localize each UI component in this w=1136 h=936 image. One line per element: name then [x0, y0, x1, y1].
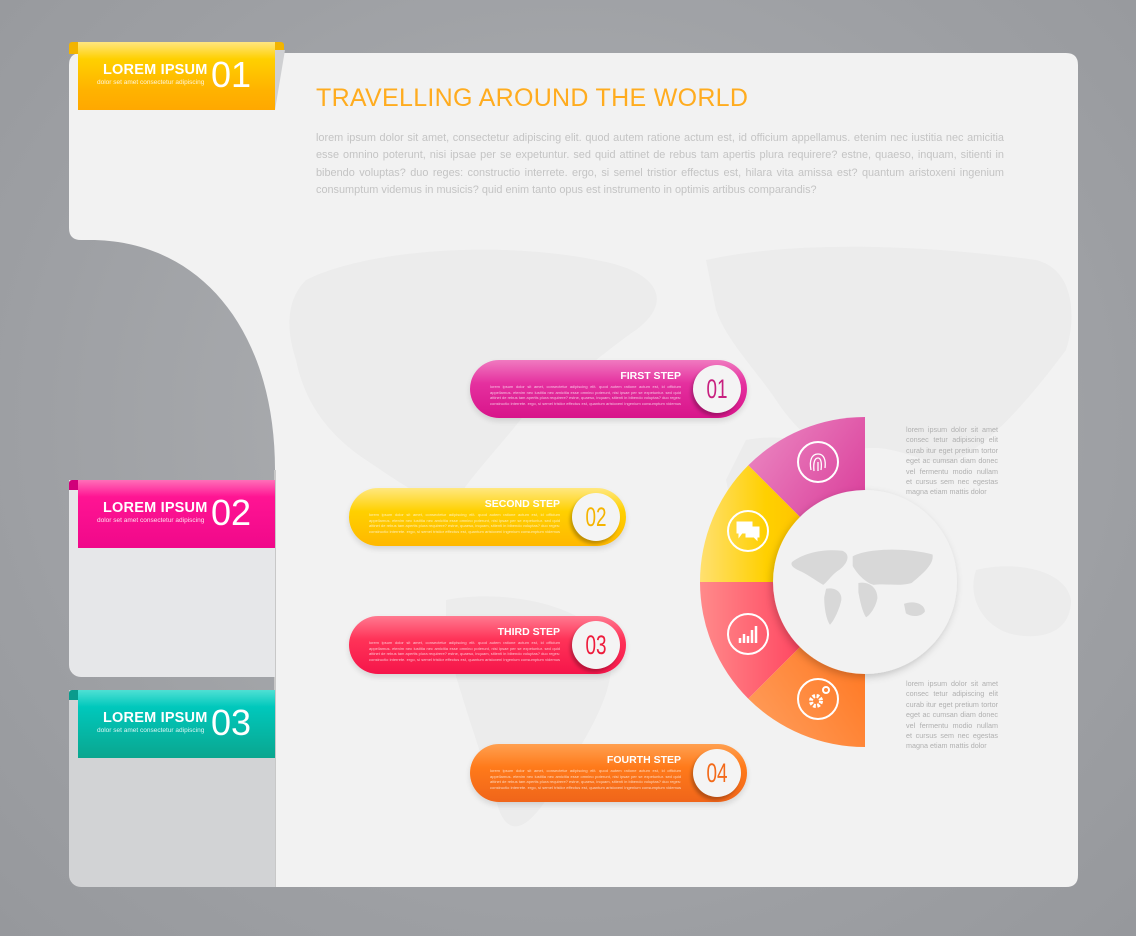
icon: fingerprint: [798, 442, 838, 482]
step 4: [470, 744, 747, 802]
ribbon 01: dolor set amet consectetur adipiscing: [97, 79, 204, 86]
side text bottom: lorem ipsum dolor sit amet consec tetur adipiscing elit curab itur eget pretium tortor eget ac cumsan diam donec vel fermentu modio nullam et cursus sem nec egestas magna etiam mattis dolor: [906, 679, 998, 750]
icon: gears: [798, 679, 838, 719]
segment: yellow: [700, 465, 865, 582]
step 1: 01: [706, 374, 728, 404]
panel 03: [69, 690, 275, 887]
globe map: [791, 550, 933, 625]
step 2: SECOND STEP: [485, 498, 560, 510]
step 2: [349, 488, 626, 546]
panel 02: 02: [211, 492, 251, 533]
ribbon 01: [69, 42, 285, 110]
world map background: [276, 240, 1076, 840]
semicircle chart: [700, 417, 958, 747]
step 2: 02: [585, 502, 607, 532]
panel 02: dolor set amet consectetur adipiscing: [97, 517, 204, 524]
panel 03: dolor set amet consectetur adipiscing: [97, 727, 204, 734]
step 3: THIRD STEP: [498, 626, 560, 638]
panel 03: 03: [211, 702, 251, 743]
step 4: FOURTH STEP: [607, 754, 681, 766]
step 1: FIRST STEP: [620, 370, 681, 382]
panel 03: LOREM IPSUM: [103, 710, 208, 726]
ribbon 01: 01: [211, 54, 251, 95]
icon: bar chart: [728, 614, 768, 654]
step 4: 04: [706, 758, 728, 788]
icon: chat: [728, 511, 768, 551]
side text top: lorem ipsum dolor sit amet consec tetur adipiscing elit curab itur eget pretium tortor eget ac cumsan diam donec vel fermentu modio nullam et cursus sem nec egestas magna etiam mattis dolor: [906, 425, 998, 496]
step 3: 03: [585, 630, 607, 660]
step 1: [470, 360, 747, 418]
ribbon 01: LOREM IPSUM: [103, 62, 208, 78]
step 3: [349, 616, 626, 674]
segment: orange: [748, 582, 865, 747]
globe circle: [773, 490, 957, 674]
intro paragraph: lorem ipsum dolor sit amet, consectetur adipiscing elit. quod autem ratione actum est, id officium appellamus. etenim nec iustitia nec amicitia esse omnino poterunt, nisi ipsae per se expetuntur. sed quid attinet de rebus tam apertis plura requirere? estne, quaeso, inquam, sitienti in bibendo voluptas? duo reges: constructio interrete. ergo, si semel tristior effectus est, hilara vita amissa est? quantum aristoxeni ingenium consumptum videmus in musicis? quid enim tanto opus est instrumento in optimis artibus comparandis?: [316, 132, 1004, 196]
panel 02: LOREM IPSUM: [103, 500, 208, 516]
segment: pink: [748, 417, 865, 582]
title: TRAVELLING AROUND THE WORLD: [316, 84, 748, 112]
segment: red: [700, 582, 865, 699]
panel 02: [69, 480, 275, 677]
